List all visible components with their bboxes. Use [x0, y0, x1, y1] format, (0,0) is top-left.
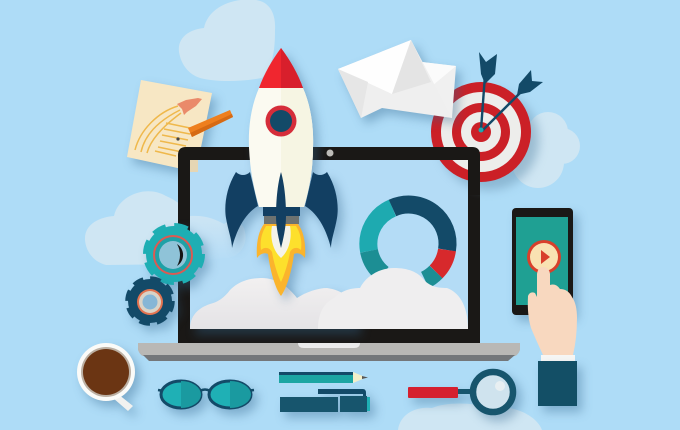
- left lens: [161, 381, 201, 408]
- coffee: [83, 349, 129, 395]
- lens: [473, 372, 513, 412]
- paper sheet: [127, 80, 212, 172]
- cup handle: [113, 394, 133, 411]
- back envelope: [385, 62, 456, 118]
- flame: [257, 224, 305, 296]
- envelope: [338, 40, 456, 118]
- rocket body: [249, 88, 313, 207]
- target rings: [431, 82, 531, 182]
- glasses frame: [158, 390, 254, 391]
- handle: [457, 389, 473, 394]
- phone body: [512, 208, 573, 315]
- right lens: [209, 381, 251, 408]
- magnifying glass: [408, 372, 513, 412]
- gear teal ring: [154, 236, 192, 274]
- screen cloud back: [190, 216, 246, 262]
- cuff: [541, 355, 575, 361]
- gear navy teeth: [127, 278, 173, 324]
- gear teal hole: [159, 241, 187, 269]
- laptop: [138, 147, 520, 361]
- laptop base: [138, 343, 520, 356]
- gear teal teeth: [145, 225, 203, 283]
- gear teal: [145, 225, 203, 283]
- pencil: [279, 372, 368, 383]
- hand: [528, 267, 577, 406]
- pen: [280, 389, 370, 412]
- donut chart: [368, 205, 448, 280]
- phone: [512, 208, 573, 315]
- glasses: [158, 381, 254, 408]
- screen shade: [190, 160, 198, 172]
- arrow 1: [479, 52, 497, 130]
- screen clouds: [190, 268, 468, 329]
- trackpad notch: [298, 343, 360, 348]
- front envelope: [338, 40, 452, 118]
- coffee cup: [77, 343, 135, 411]
- hand shape: [528, 267, 577, 355]
- left wing: [225, 172, 258, 248]
- porthole: [266, 106, 296, 136]
- arrow 2: [482, 70, 543, 131]
- sleeve: [538, 361, 577, 406]
- centre fin: [276, 172, 286, 248]
- background clouds: [85, 0, 580, 430]
- nose cone: [259, 48, 303, 88]
- laptop screen: [190, 160, 468, 329]
- play button: [527, 240, 561, 274]
- gear navy: [127, 278, 173, 324]
- pencil on paper: [188, 110, 233, 137]
- paper dot: [176, 137, 180, 141]
- target: [431, 52, 543, 190]
- gear navy ring: [137, 289, 163, 315]
- paper rocket: [177, 98, 202, 115]
- paper lines: [155, 123, 190, 156]
- paper trails: [135, 106, 181, 153]
- rocket: [225, 48, 338, 296]
- paper note: [127, 80, 212, 172]
- nozzle: [263, 207, 300, 216]
- phone screen: [516, 217, 568, 305]
- camera: [326, 150, 334, 156]
- laptop bezel: [178, 147, 480, 343]
- cup rim: [77, 343, 135, 401]
- target shadow: [439, 90, 539, 190]
- laptop bezel over target: [430, 147, 480, 195]
- right wing: [305, 172, 338, 248]
